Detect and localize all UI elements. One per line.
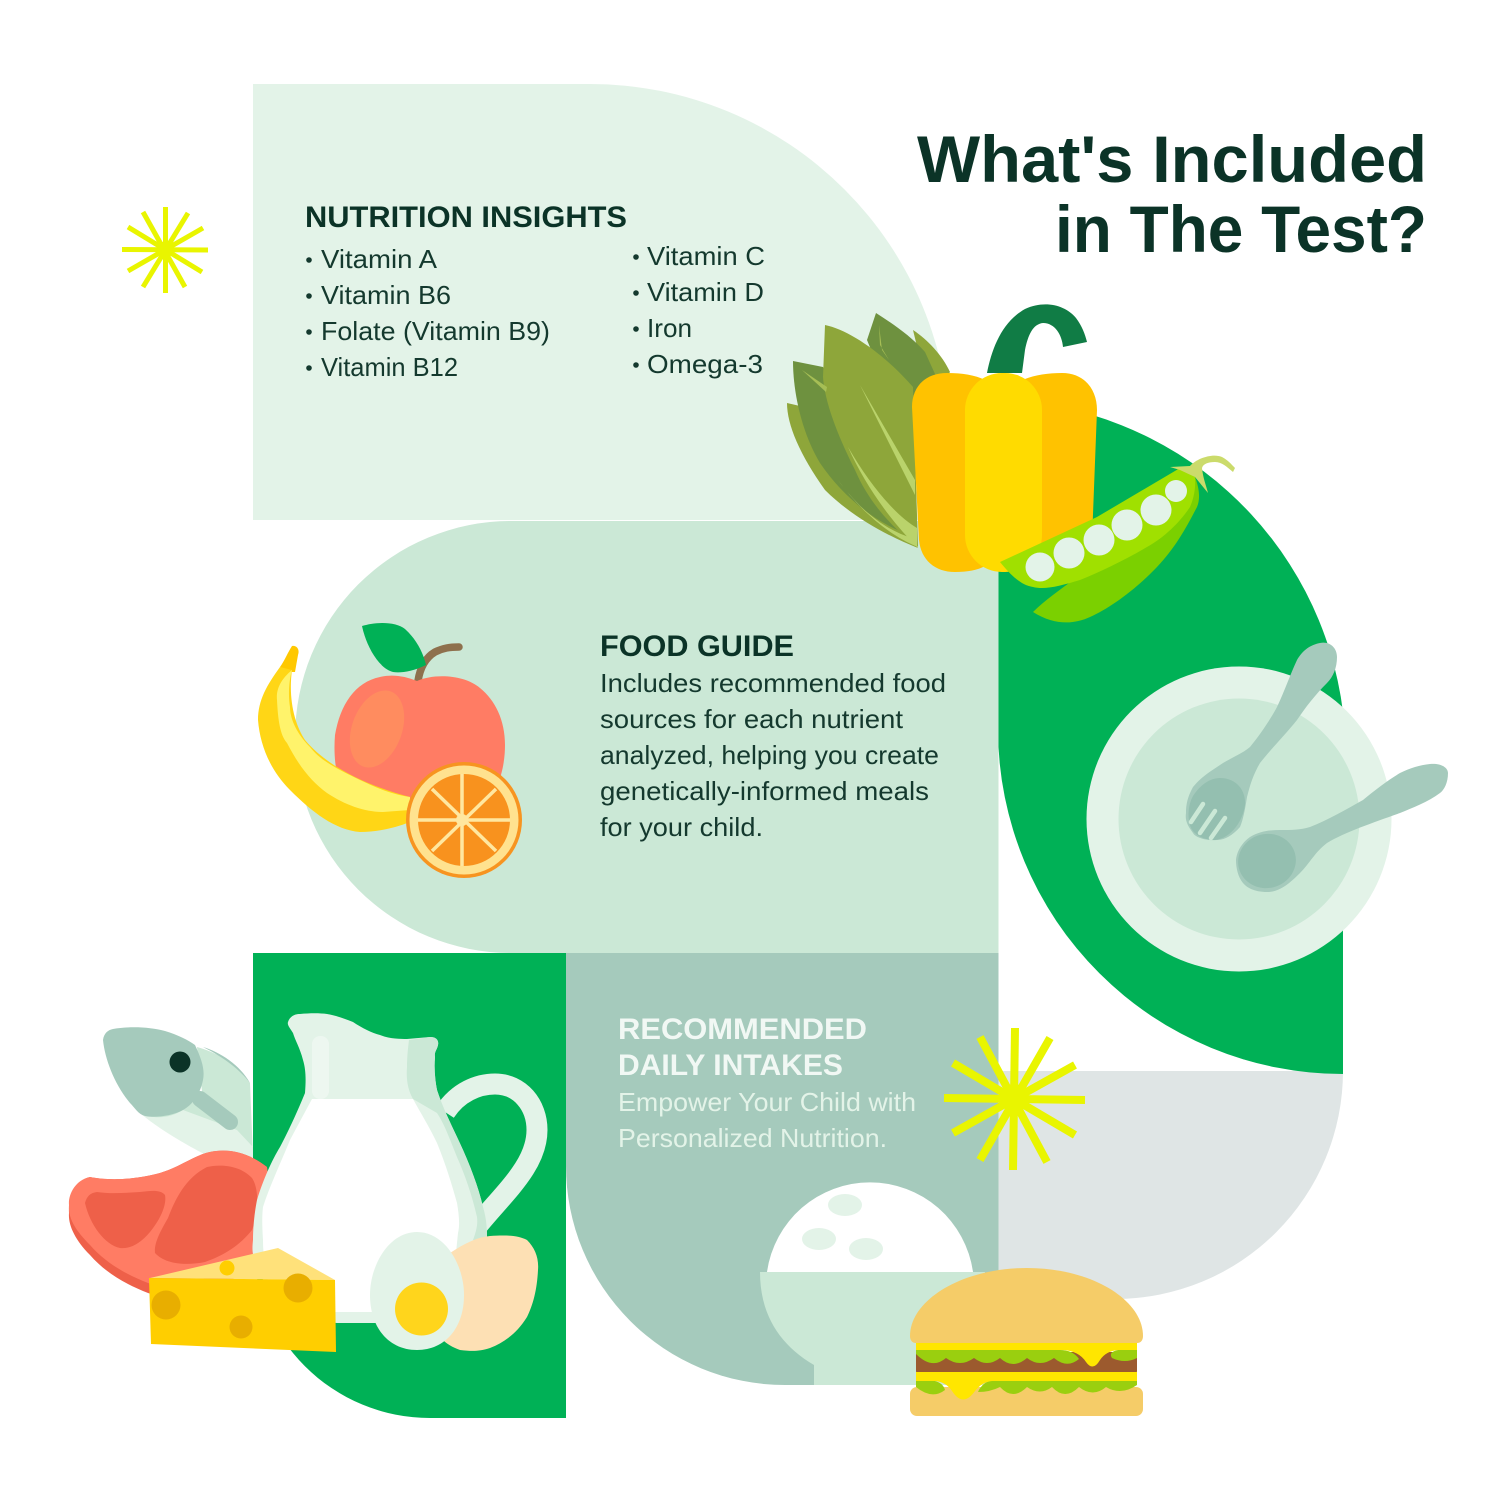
food guide text block: Includes recommended food — [600, 668, 946, 698]
nutrition insights text block: Vitamin C — [647, 241, 765, 271]
jug handle — [445, 1084, 537, 1225]
icon: spoon — [1232, 764, 1448, 895]
nutrition insights text block: Vitamin B6 — [321, 280, 451, 310]
jug left highlight — [312, 1036, 329, 1099]
icon: orange slice — [406, 762, 522, 878]
panel: nutrition insights background — [253, 84, 950, 520]
food guide text block — [600, 630, 946, 842]
icon: boiled egg — [370, 1232, 464, 1350]
food guide text block: FOOD GUIDE — [600, 630, 794, 663]
panel: big green arc — [998, 400, 1343, 1074]
food guide text block: analyzed, helping you create — [600, 740, 939, 770]
apple body — [334, 676, 505, 815]
icon: rice bowl — [760, 1182, 985, 1385]
jug glass — [252, 1013, 487, 1323]
food guide text block: for your child. — [600, 812, 763, 842]
icon: large yellow star — [944, 1028, 1085, 1170]
panel: grey quarter — [998, 1071, 1343, 1299]
pepper side lobes — [912, 373, 1097, 572]
panel: food guide background — [295, 521, 998, 953]
burger patty — [916, 1352, 1137, 1373]
icon: cheese wedge — [149, 1248, 336, 1352]
nutrition insights text block: Folate (Vitamin B9) — [321, 316, 550, 346]
icon: small yellow star — [122, 207, 208, 293]
panel: recommended daily intakes background — [566, 953, 998, 1385]
icon: apple — [334, 623, 505, 815]
icon: steak — [69, 1151, 275, 1300]
icon: artichoke leaves — [787, 313, 950, 548]
burger lettuce lower — [916, 1381, 1137, 1394]
recommended daily intakes text block: Empower Your Child with — [618, 1087, 916, 1117]
icon: fish — [103, 1027, 253, 1157]
panel: green dairy background — [253, 953, 566, 1418]
pepper centre lobe — [965, 373, 1042, 572]
recommended daily intakes text block: RECOMMENDED — [618, 1013, 867, 1046]
jug right shade — [407, 1037, 487, 1240]
icon: pea pod — [1000, 456, 1235, 622]
nutrition insights text block: Omega-3 — [647, 349, 763, 379]
food guide text block: genetically-informed meals — [600, 776, 929, 806]
nutrition insights text block: Vitamin B12 — [321, 352, 458, 382]
burger cheese upper — [916, 1341, 1137, 1367]
pepper stem — [987, 304, 1087, 373]
nutrition insights text block — [305, 201, 765, 382]
nutrition insights text block: NUTRITION INSIGHTS — [305, 201, 627, 234]
icon: brown egg — [443, 1235, 538, 1351]
milk — [262, 1099, 459, 1312]
icon: plate — [1086, 666, 1392, 972]
burger top bun — [910, 1268, 1143, 1343]
icon: banana — [258, 646, 410, 832]
nutrition insights text block: Vitamin D — [647, 277, 764, 307]
title: What's Included — [917, 122, 1427, 196]
apple leaf — [362, 623, 426, 672]
recommended daily intakes text block — [618, 1013, 916, 1153]
icon: yellow bell pepper — [912, 304, 1097, 572]
title — [917, 122, 1427, 266]
burger cheese lower — [916, 1372, 1137, 1400]
icon: burger — [910, 1268, 1143, 1416]
apple stem — [418, 647, 459, 681]
food guide text block: sources for each nutrient — [600, 704, 904, 734]
nutrition insights text block: Iron — [647, 313, 692, 343]
nutrition insights text block: Vitamin A — [321, 244, 438, 274]
burger lettuce upper — [916, 1350, 1137, 1364]
recommended daily intakes text block: DAILY INTAKES — [618, 1049, 843, 1082]
recommended daily intakes text block: Personalized Nutrition. — [618, 1123, 887, 1153]
icon: milk jug — [252, 1013, 537, 1323]
title: in The Test? — [1055, 192, 1427, 266]
icon: fork — [1186, 643, 1337, 840]
burger bottom bun — [910, 1387, 1143, 1416]
